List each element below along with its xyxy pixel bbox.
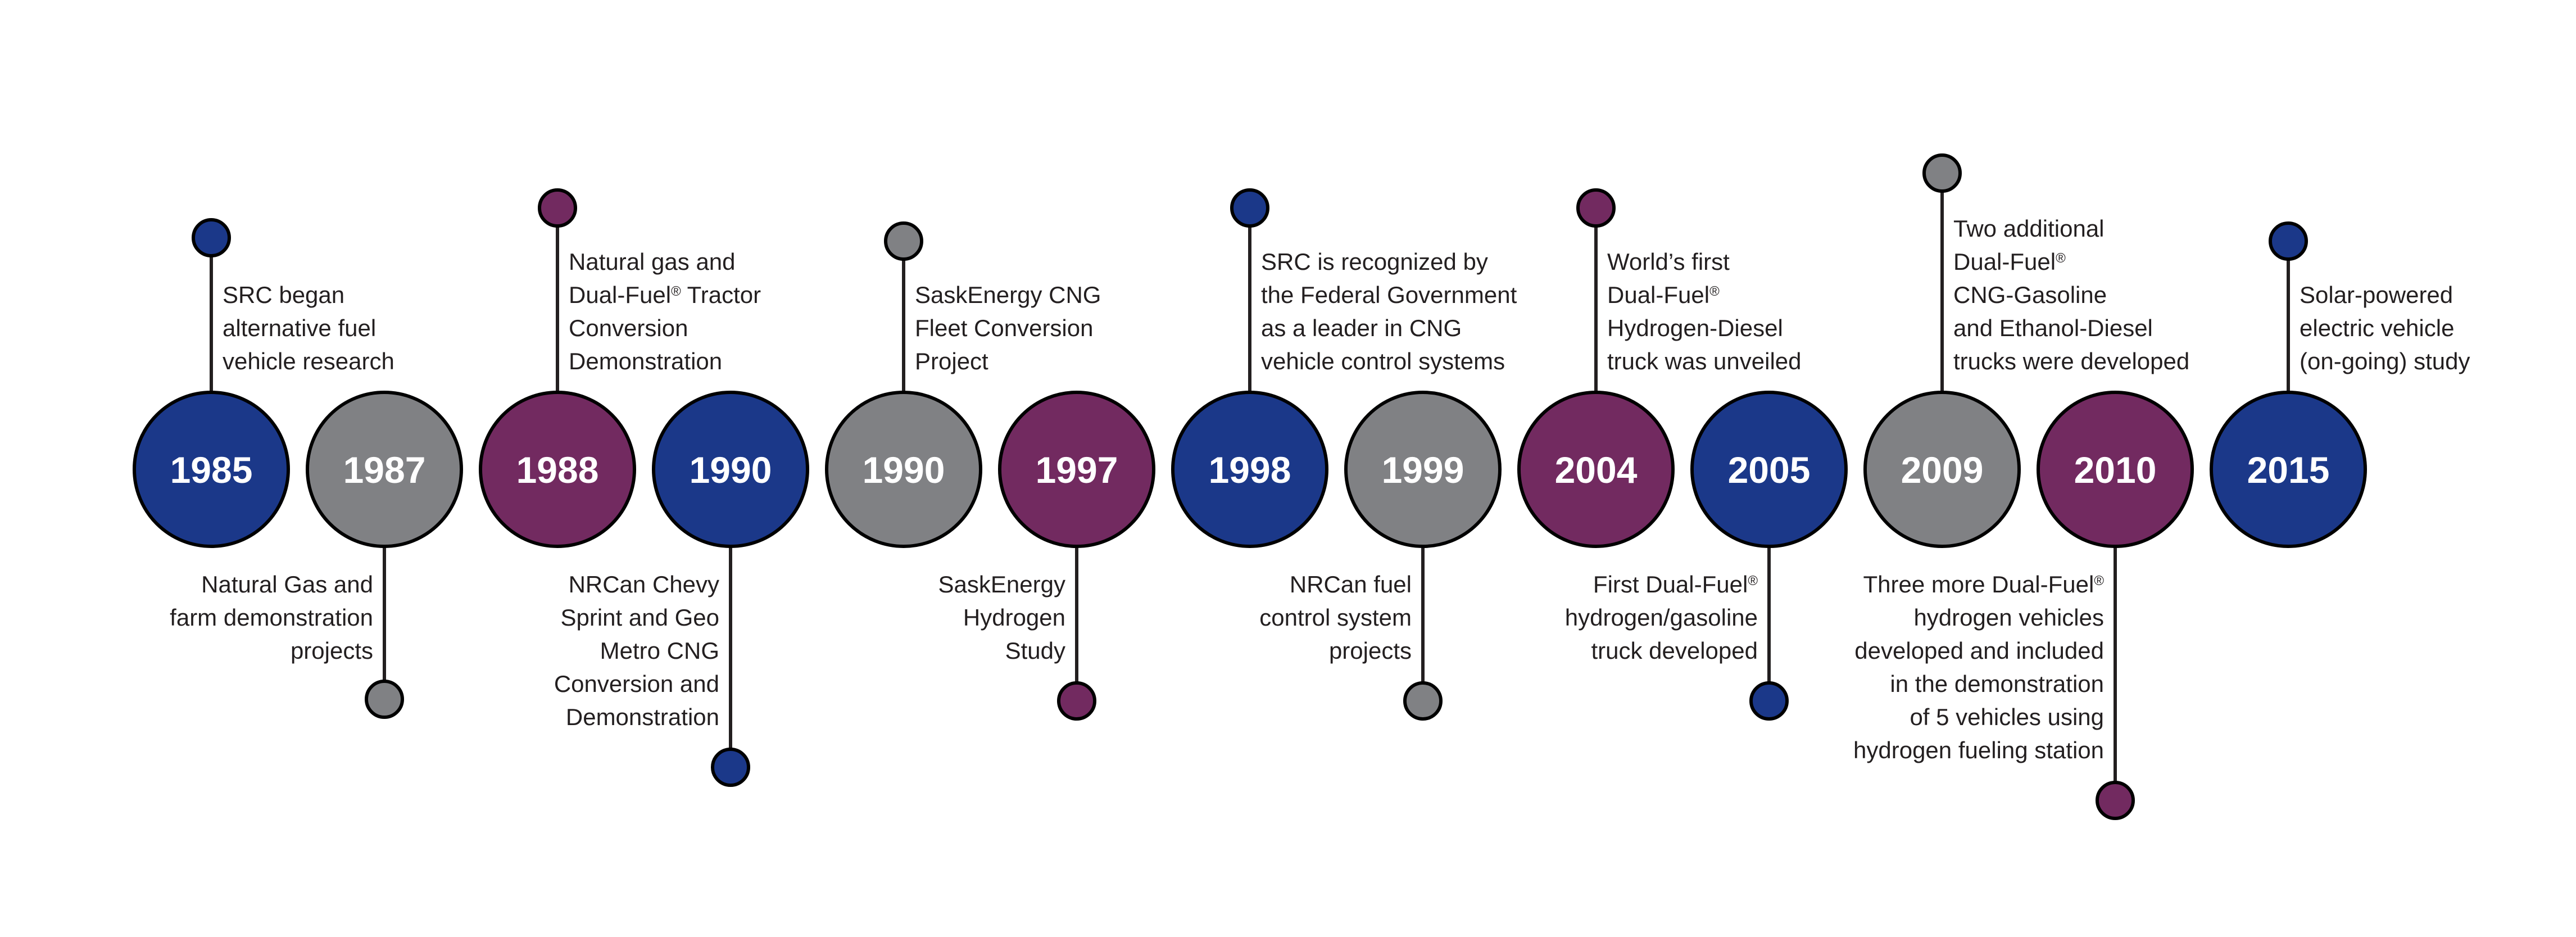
milestone 1990 (SaskEnergy): Fleet Conversion: [915, 315, 1093, 341]
milestone 1990 (NRCan): 1990: [690, 449, 772, 491]
milestone 1998: [1173, 190, 1517, 546]
milestone 2004: 2004: [1555, 449, 1638, 491]
milestone 2010: in the demonstration: [1890, 671, 2104, 697]
milestone 2015: Solar-powered: [2300, 282, 2453, 308]
milestone 2010: [1853, 392, 2192, 818]
milestone 2010: 2010: [2074, 449, 2156, 491]
milestone 1985: SRC began: [223, 282, 344, 308]
milestone 1987: farm demonstration: [170, 604, 373, 631]
milestone 1990 (NRCan): Demonstration: [566, 704, 719, 730]
milestone 1998: 1998: [1209, 449, 1291, 491]
milestone 1998: SRC is recognized by: [1261, 248, 1488, 275]
milestone 1985: vehicle research: [223, 348, 394, 374]
milestone 1999: 1999: [1382, 449, 1464, 491]
milestone 2004: Dual-Fuel®: [1607, 282, 1720, 308]
milestone 1997: SaskEnergy: [938, 571, 1065, 597]
milestone 1998: as a leader in CNG: [1261, 315, 1462, 341]
milestone 2004: World’s first: [1607, 248, 1730, 275]
milestone 1999: control system: [1259, 604, 1412, 631]
milestone 1997: Hydrogen: [963, 604, 1065, 631]
milestone 1988: Demonstration: [569, 348, 722, 374]
milestone 1997: 1997: [1036, 449, 1118, 491]
milestone 1990 (SaskEnergy): [827, 223, 1101, 546]
milestone 1985: 1985: [170, 449, 252, 491]
milestone 2015: electric vehicle: [2300, 315, 2454, 341]
milestone 2005: [1565, 392, 1846, 719]
milestone 2015: (on-going) study: [2300, 348, 2470, 374]
milestone 2009: Dual-Fuel®: [1953, 248, 2066, 275]
milestone 2005: hydrogen/gasoline: [1565, 604, 1758, 631]
milestone 1997: [938, 392, 1154, 719]
milestone 1988: [480, 190, 761, 546]
milestone 1987: Natural Gas and: [201, 571, 373, 597]
milestone 1990 (NRCan): Metro CNG: [600, 637, 719, 664]
milestone 1985: alternative fuel: [223, 315, 376, 341]
milestone 2015: [2211, 223, 2470, 546]
milestone 1990 (NRCan): Conversion and: [554, 671, 719, 697]
milestone 1990 (NRCan): Sprint and Geo: [560, 604, 719, 631]
milestone 1988: Natural gas and: [569, 248, 736, 275]
milestone 2009: CNG-Gasoline: [1953, 282, 2107, 308]
milestone 2010: hydrogen vehicles: [1913, 604, 2104, 631]
milestone 2009: Two additional: [1953, 215, 2105, 242]
milestone 2009: 2009: [1901, 449, 1983, 491]
milestone 1990 (SaskEnergy): SaskEnergy CNG: [915, 282, 1101, 308]
milestone 2005: 2005: [1728, 449, 1810, 491]
milestone 2009: trucks were developed: [1953, 348, 2189, 374]
milestone 1985: [134, 220, 394, 546]
milestone 2004: [1519, 190, 1802, 546]
milestone 1988: Conversion: [569, 315, 688, 341]
milestone 1988: Dual-Fuel® Tractor: [569, 282, 761, 308]
milestone 2004: truck was unveiled: [1607, 348, 1802, 374]
milestone 2010: of 5 vehicles using: [1910, 704, 2104, 730]
milestone 1999: projects: [1329, 637, 1412, 664]
milestone 2009: [1865, 155, 2189, 546]
milestone 1987: [170, 392, 461, 717]
milestone 1999: NRCan fuel: [1290, 571, 1412, 597]
milestone 1990 (NRCan): [554, 392, 808, 785]
milestone 2010: hydrogen fueling station: [1853, 737, 2104, 763]
milestone 1988: 1988: [516, 449, 598, 491]
milestone 1990 (SaskEnergy): 1990: [863, 449, 945, 491]
milestone 1990 (NRCan): NRCan Chevy: [569, 571, 719, 597]
milestone 1998: vehicle control systems: [1261, 348, 1505, 374]
milestone 1990 (SaskEnergy): Project: [915, 348, 988, 374]
milestone 2010: Three more Dual-Fuel®: [1863, 571, 2104, 597]
milestone 2005: truck developed: [1591, 637, 1758, 664]
milestone 1997: Study: [1005, 637, 1065, 664]
milestone 1987: 1987: [343, 449, 425, 491]
milestone 2010: developed and included: [1854, 637, 2104, 664]
milestone 1987: projects: [291, 637, 373, 664]
milestone 2015: 2015: [2247, 449, 2329, 491]
milestone 2005: First Dual-Fuel®: [1593, 571, 1758, 597]
milestone 2004: Hydrogen-Diesel: [1607, 315, 1783, 341]
milestone 2009: and Ethanol-Diesel: [1953, 315, 2153, 341]
milestone 1998: the Federal Government: [1261, 282, 1517, 308]
milestone 1999: [1259, 392, 1500, 719]
